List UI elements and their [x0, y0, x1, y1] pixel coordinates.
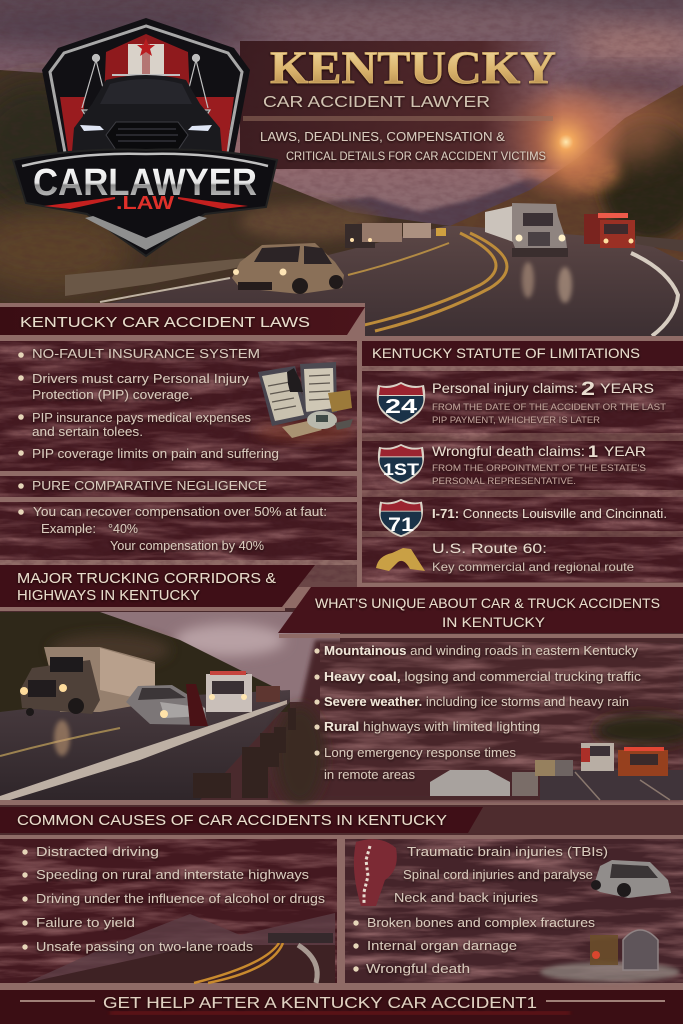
- panel: compensation example: Example:: [41, 521, 96, 536]
- text block: [36, 844, 326, 954]
- text block: in remote areas: [324, 768, 415, 782]
- footer call to action: GET HELP AFTER A KENTUCKY CAR ACCIDENT1: [103, 995, 537, 1012]
- list: injuries: Internal organ darnage: [367, 938, 517, 953]
- bullets: [18, 352, 24, 456]
- content background bands: [0, 303, 683, 1024]
- semi truck: [485, 203, 568, 257]
- hero scene background: [0, 0, 683, 306]
- panel: no-fault insurance: [18, 346, 355, 461]
- emergency vehicles, lower right: [430, 743, 668, 796]
- crashed car: [126, 684, 208, 726]
- text block: Long emergency response times: [324, 746, 516, 760]
- icon: interstate shield 71: 71: [388, 515, 415, 536]
- title plate: [240, 41, 562, 169]
- panel: wrongful death deadline: FROM THE ORPOINTMENT OF THE ESTATE'S: [432, 463, 646, 474]
- list: injuries: Broken bones and complex fractures: [367, 915, 596, 930]
- heading: what's unique: IN KENTUCKY: [442, 614, 546, 630]
- panel: wrongful death deadline: Wrongful death claims:: [432, 443, 585, 459]
- tagline: LAWS, DEADLINES, COMPENSATION &: [260, 130, 506, 144]
- tagline: CRITICAL DETAILS FOR CAR ACCIDENT VICTIMS: [286, 151, 546, 163]
- panel: I-71: I-71: Connects Louisville and Cincinnati.: [432, 506, 667, 521]
- footer call to action: [0, 990, 683, 1024]
- heading: major trucking corridors: HIGHWAYS IN KENTUCKY: [17, 587, 200, 604]
- panel: personal injury deadline: Personal injury claims:: [432, 380, 578, 396]
- icon: interstate shield 24: [377, 382, 425, 424]
- text block: Severe weather. including ice storms and heavy rain: [324, 695, 629, 709]
- text block: Rural highways with limited lighting: [324, 720, 540, 734]
- heading: what's unique: WHAT'S UNIQUE ABOUT CAR & TRUCK ACCIDENTS: [315, 595, 660, 611]
- car on highway: [232, 243, 344, 294]
- banner: [13, 149, 277, 256]
- highway road: [65, 226, 683, 338]
- heading: what's unique: [278, 587, 683, 638]
- panel: I-71: [379, 499, 667, 537]
- icon: gold Kentucky shape: [376, 548, 425, 571]
- heading: Kentucky car accident laws: [0, 307, 365, 335]
- panels: maroon fields: [0, 341, 683, 1024]
- photo: accident scene on mountain highway: [0, 608, 683, 805]
- panel: compensation example: °40%: [108, 521, 138, 536]
- red and white flag crest: [60, 34, 234, 165]
- panel: compensation example: [18, 504, 327, 553]
- text block: Unsafe passing on two-lane roads: [36, 939, 254, 954]
- road vignette, causes panel: [26, 913, 335, 983]
- silver car: [591, 860, 671, 898]
- icon: interstate shield 1st: [378, 444, 424, 484]
- panel: pure comparative negligence: PURE COMPARATIVE NEGLIGENCE: [32, 478, 267, 493]
- text block: and sertain tolees.: [32, 424, 143, 439]
- list: injuries: Wrongful death: [366, 961, 470, 976]
- scales of justice: [82, 54, 210, 118]
- fire truck: [584, 213, 635, 248]
- panel: wrongful death deadline: PERSONAL REPRESENTATIVE.: [432, 476, 576, 487]
- list: injuries: [353, 844, 608, 976]
- truck convoy: [345, 223, 446, 248]
- heading: common causes: [0, 805, 683, 835]
- wordmark: CARLAWYER: [33, 162, 257, 204]
- list: injuries: Neck and back injuries: [394, 890, 539, 905]
- text block: Speeding on rural and interstate highways: [36, 867, 310, 882]
- list: injuries: Spinal cord injuries and paralyse: [403, 867, 593, 882]
- text block: NO-FAULT INSURANCE SYSTEM: [32, 346, 260, 361]
- icon: brain and spine: [354, 839, 397, 906]
- text block: Distracted driving: [36, 844, 159, 859]
- vertical dividers: [0, 336, 362, 986]
- texture over panels: [0, 341, 683, 983]
- guardrail posts: [193, 708, 296, 798]
- tombstone and rubble: [540, 930, 680, 982]
- heading: statute of limitations: [362, 341, 683, 366]
- text block: [324, 644, 641, 782]
- text block: Mountainous and winding roads in eastern Kentucky: [324, 644, 639, 658]
- list: common causes: [22, 844, 326, 954]
- panel: wrongful death deadline: YEAR: [604, 443, 646, 459]
- heavy truck: [20, 647, 155, 716]
- heading: common causes: COMMON CAUSES OF CAR ACCIDENTS IN KENTUCKY: [17, 812, 447, 829]
- subtitle: CAR ACCIDENT LAWYER: [263, 94, 490, 111]
- text block: Failure to yield: [36, 915, 135, 930]
- icon: interstate shield 71: [379, 499, 423, 537]
- list: what's unique: [314, 644, 641, 782]
- heading: major trucking corridors: [0, 565, 315, 611]
- text block: Driving under the influence of alcohol or drugs: [36, 891, 326, 906]
- ambulance: [206, 671, 280, 712]
- heading: major trucking corridors: MAJOR TRUCKING CORRIDORS &: [17, 570, 276, 587]
- panel: US route 60: [376, 540, 634, 574]
- panel: personal injury deadline: 2: [581, 379, 595, 400]
- bullets: [314, 648, 320, 756]
- panel: personal injury deadline: [377, 379, 666, 426]
- text block: Protection (PIP) coverage.: [32, 387, 193, 402]
- text block: PIP insurance pays medical expenses: [32, 410, 251, 425]
- panel: wrongful death deadline: 1: [588, 442, 598, 461]
- panel: compensation example: Your compensation by 40%: [110, 538, 264, 553]
- wordmark: .law: .LAW: [116, 193, 174, 213]
- tagline: [260, 130, 546, 163]
- panel: personal injury deadline: PIP PAYMENT, WHICHEVER IS LATER: [432, 415, 600, 426]
- panel: compensation example: You can recover compensation over 50% at faut:: [33, 504, 327, 519]
- logo: CarLawyer.law shield: [13, 18, 277, 256]
- bullets: [22, 849, 28, 950]
- black car front: [72, 75, 222, 152]
- list: injuries: Traumatic brain injuries (TBIs): [407, 844, 608, 859]
- red accents: [44, 197, 248, 209]
- title: Kentucky: KENTUCKY: [270, 42, 556, 94]
- text block: Drivers must carry Personal Injury: [32, 371, 250, 386]
- text block: PIP coverage limits on pain and suffering: [32, 446, 279, 461]
- panel: US route 60: U.S. Route 60:: [432, 540, 547, 556]
- heading: Kentucky car accident laws: KENTUCKY CAR ACCIDENT LAWS: [20, 314, 310, 331]
- text block: Heavy coal, logsing and commercial trucking traffic: [324, 670, 641, 684]
- panel: personal injury deadline: YEARS: [600, 380, 654, 396]
- panel: US route 60: Key commercial and regional route: [432, 560, 634, 574]
- panel: wrongful death deadline: [378, 442, 646, 487]
- panel: personal injury deadline: FROM THE DATE OF THE ACCIDENT OR THE LAST: [432, 402, 666, 413]
- text block: [32, 346, 279, 461]
- heading: statute of limitations: KENTUCKY STATUTE OF LIMITATIONS: [372, 345, 640, 361]
- icon: clipboards and paperwork: [255, 362, 355, 441]
- icon: interstate shield 1st: 1ST: [383, 460, 420, 479]
- icon: interstate shield 24: 24: [385, 396, 418, 418]
